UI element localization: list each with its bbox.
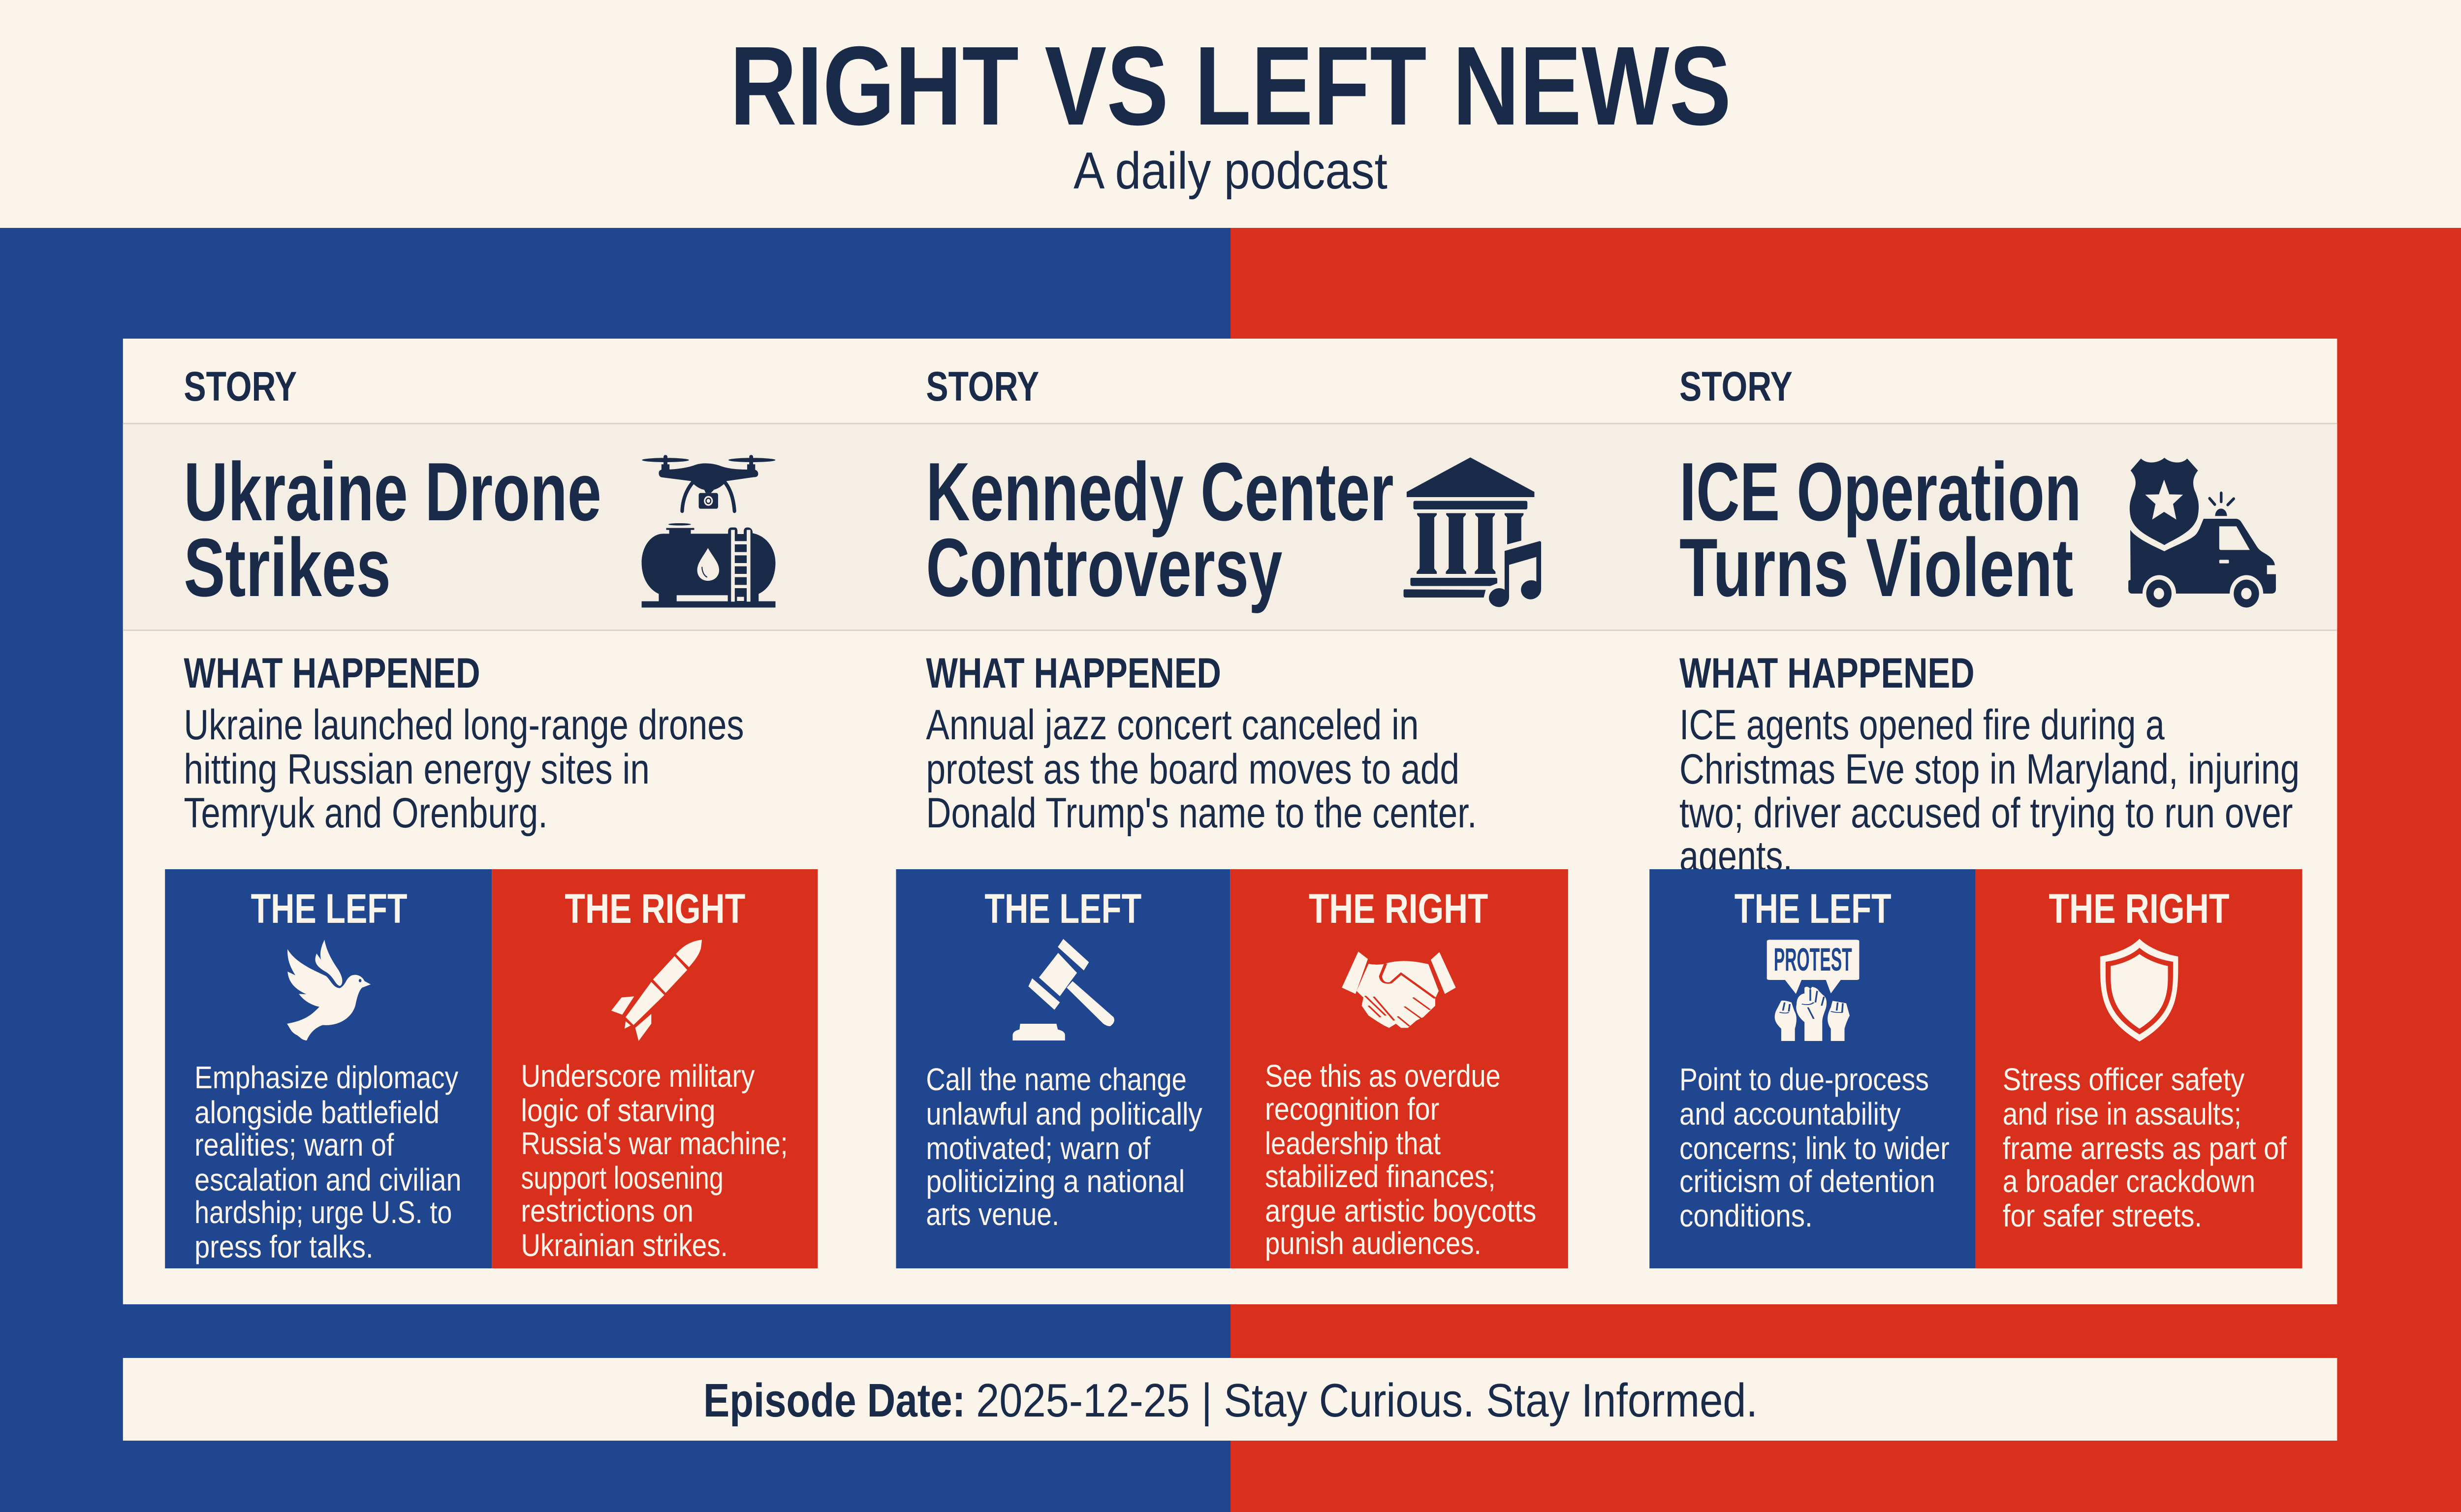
what happened text: two; driver accused of trying to run over	[1679, 790, 2293, 837]
subtitle: A daily podcast	[1073, 142, 1388, 200]
story headline: Controversy	[926, 522, 1282, 614]
what happened heading: WHAT HAPPENED	[184, 650, 480, 697]
left viewpoint text	[926, 1062, 1202, 1232]
left viewpoint text: Call the name change	[926, 1062, 1187, 1097]
what happened text: Temryuk and Orenburg.	[184, 790, 548, 837]
right viewpoint text: frame arrests as part of	[2003, 1131, 2287, 1166]
what happened text: Annual jazz concert canceled in	[926, 702, 1419, 749]
heading: the left: THE LEFT	[1735, 886, 1892, 932]
icon: missile	[611, 940, 702, 1041]
story headline: Strikes	[184, 522, 391, 614]
right viewpoint text	[1265, 1058, 1536, 1261]
episode date label: Episode Date:	[703, 1374, 965, 1427]
heading: the right: THE RIGHT	[1309, 886, 1488, 932]
story headline: ICE Operation	[1679, 446, 2082, 538]
what happened text: Christmas Eve stop in Maryland, injuring	[1679, 746, 2300, 793]
right viewpoint text: for safer streets.	[2003, 1198, 2202, 1233]
what happened text	[1679, 702, 2300, 880]
story label: STORY	[184, 364, 297, 410]
story label: STORY	[1679, 364, 1793, 410]
right viewpoint text: leadership that	[1265, 1126, 1441, 1161]
right viewpoint text: Russia's war machine;	[521, 1126, 788, 1161]
right viewpoint text: Underscore military	[521, 1058, 755, 1094]
main panel background	[123, 339, 2337, 1304]
left viewpoint text: realities; warn of	[194, 1127, 394, 1163]
what happened text	[926, 702, 1477, 837]
left viewpoint text: alongside battlefield	[194, 1095, 440, 1130]
icon: dove	[287, 940, 371, 1040]
title: RIGHT VS LEFT NEWS	[730, 24, 1731, 149]
panel: the right on ICE	[1975, 869, 2303, 1268]
story 1: Ukraine drone strikes	[165, 364, 818, 1268]
panel: the left on ICE	[1649, 869, 1975, 1268]
left viewpoint text: arts venue.	[926, 1197, 1059, 1232]
what happened text	[184, 702, 744, 837]
right viewpoint text: and rise in assaults;	[2003, 1096, 2241, 1132]
icon: police badge and van	[2128, 458, 2276, 607]
story label: STORY	[926, 364, 1039, 410]
right viewpoint text: recognition for	[1265, 1091, 1439, 1127]
right viewpoint text: See this as overdue	[1265, 1058, 1501, 1094]
left viewpoint text: escalation and civilian	[194, 1162, 462, 1197]
left viewpoint text: Point to due-process	[1679, 1062, 1929, 1097]
left viewpoint text: motivated; warn of	[926, 1131, 1151, 1166]
right viewpoint text	[521, 1058, 788, 1263]
icon: gavel	[1012, 939, 1114, 1040]
what happened text: agents.	[1679, 833, 1793, 880]
story 3: ICE operation turns violent	[1649, 364, 2303, 1268]
what happened text: protest as the board moves to add	[926, 746, 1459, 793]
left viewpoint text: unlawful and politically	[926, 1096, 1202, 1132]
header band	[0, 0, 2461, 228]
left viewpoint text: criticism of detention	[1679, 1164, 1935, 1199]
what happened text: ICE agents opened fire during a	[1679, 702, 2165, 749]
background: blue half	[0, 228, 1230, 1512]
right viewpoint text: support loosening	[521, 1160, 724, 1196]
right viewpoint text: restrictions on	[521, 1193, 694, 1228]
panel: the right on Kennedy Center	[1230, 869, 1568, 1268]
panel: the left on Kennedy Center	[896, 869, 1230, 1268]
left viewpoint text	[194, 1060, 462, 1264]
left viewpoint text: conditions.	[1679, 1198, 1813, 1233]
icon: protest sign and fists	[1767, 940, 1859, 1041]
panel: the right on Ukraine	[492, 869, 818, 1268]
right viewpoint text: punish audiences.	[1265, 1226, 1482, 1261]
right viewpoint text	[2003, 1062, 2287, 1233]
story headline: Kennedy Center	[926, 446, 1394, 538]
icon: columned building with music note	[1404, 457, 1541, 607]
right viewpoint text: stabilized finances;	[1265, 1159, 1496, 1194]
story headline: Ukraine Drone	[184, 446, 601, 538]
left viewpoint text: politicizing a national	[926, 1164, 1185, 1199]
right viewpoint text: argue artistic boycotts	[1265, 1193, 1536, 1228]
what happened heading: WHAT HAPPENED	[1679, 650, 1975, 697]
footer bar	[123, 1358, 2337, 1441]
left viewpoint text: and accountability	[1679, 1096, 1901, 1132]
heading: the right: THE RIGHT	[565, 886, 745, 932]
icon: drone over oil tank	[642, 455, 776, 607]
heading: the right: THE RIGHT	[2049, 886, 2229, 932]
episode date and tagline: 2025-12-25 | Stay Curious. Stay Informed.	[976, 1374, 1758, 1427]
heading: the left: THE LEFT	[251, 886, 408, 932]
what happened text: Ukraine launched long-range drones	[184, 702, 744, 749]
right viewpoint text: a broader crackdown	[2003, 1164, 2255, 1199]
right viewpoint text: Stress officer safety	[2003, 1062, 2245, 1097]
right viewpoint text: logic of starving	[521, 1093, 715, 1128]
left viewpoint text	[1679, 1062, 1950, 1233]
left viewpoint text: concerns; link to wider	[1679, 1131, 1950, 1166]
background: red half	[1230, 228, 2461, 1512]
heading: the left: THE LEFT	[984, 886, 1141, 932]
icon: handshake	[1342, 951, 1456, 1028]
story headline: Turns Violent	[1679, 522, 2073, 614]
what happened text: Donald Trump's name to the center.	[926, 790, 1477, 837]
left viewpoint text: hardship; urge U.S. to	[194, 1195, 452, 1230]
panel: the left on Ukraine	[165, 869, 492, 1268]
what happened text: hitting Russian energy sites in	[184, 746, 650, 793]
right viewpoint text: Ukrainian strikes.	[521, 1228, 728, 1263]
left viewpoint text: press for talks.	[194, 1229, 374, 1264]
story headline	[1679, 446, 2082, 614]
left viewpoint text: Emphasize diplomacy	[194, 1060, 459, 1095]
icon: shield	[2100, 939, 2178, 1041]
what happened heading: WHAT HAPPENED	[926, 650, 1221, 697]
story 2: Kennedy Center controversy	[896, 364, 1568, 1268]
story headline	[926, 446, 1394, 614]
story headline	[184, 446, 601, 614]
sign text: PROTEST	[1774, 942, 1852, 978]
